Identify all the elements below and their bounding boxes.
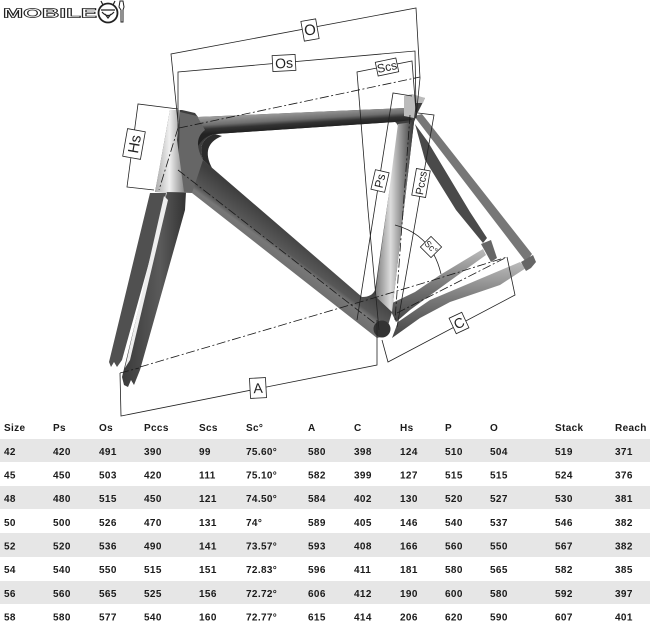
row size 42: 371: [615, 447, 633, 458]
dimension A: [120, 320, 377, 416]
row size 58: 607: [555, 612, 573, 624]
row size 45: 399: [354, 470, 372, 482]
row size 54: [4, 565, 633, 576]
row size 48: 402: [354, 494, 372, 505]
row size 45: 75.10°: [246, 470, 277, 482]
row size 56: 56: [4, 589, 16, 600]
table header: P: [445, 423, 452, 434]
row size 42: 42: [4, 447, 16, 458]
table header: C: [354, 423, 362, 434]
row size 45: 376: [615, 470, 633, 482]
row size 50: 546: [555, 518, 573, 529]
row size 54: 72.83°: [246, 565, 277, 576]
label Sc degrees: Sc°: [422, 238, 440, 256]
row size 58: 160: [199, 612, 217, 624]
table header: Stack: [555, 423, 584, 434]
row size 52: 141: [199, 542, 217, 552]
row size 42: 124: [400, 447, 418, 458]
row size 42: 420: [53, 447, 71, 458]
table header: Sc°: [246, 423, 263, 434]
table header: Size: [4, 423, 25, 434]
row size 54: 181: [400, 565, 418, 576]
row size 52: 593: [308, 542, 326, 552]
row size 58: 540: [144, 612, 162, 624]
row size 45: 111: [199, 470, 216, 482]
chain stays: [388, 249, 526, 338]
row size 56: 600: [445, 589, 463, 600]
row size 58: 206: [400, 612, 418, 624]
row size 52: 382: [615, 542, 633, 552]
row size 50: 526: [99, 518, 117, 529]
row size 45: 515: [490, 470, 508, 482]
label Hs: [123, 129, 146, 159]
row size 50: 500: [53, 518, 71, 529]
row size 54: 540: [53, 565, 71, 576]
row size 42: 390: [144, 447, 162, 458]
row size 54: 515: [144, 565, 162, 576]
row size 52: 560: [445, 542, 463, 552]
row size 58: 580: [53, 612, 71, 624]
dimension Os: [178, 51, 416, 128]
row size 56: 592: [555, 589, 573, 600]
row size 56: 580: [490, 589, 508, 600]
dropouts: [481, 240, 536, 271]
row size 58: 590: [490, 612, 508, 624]
row size 48: 381: [615, 494, 633, 505]
row size 56: 525: [144, 589, 162, 600]
row size 45: 524: [555, 470, 573, 482]
row size 50: 537: [490, 518, 508, 529]
row size 54: 582: [555, 565, 573, 576]
row size 48: 480: [53, 494, 71, 505]
table header: A: [308, 423, 316, 434]
inner dark band: [201, 134, 222, 168]
dimension Ps: [357, 93, 412, 320]
label O: O: [303, 21, 317, 40]
row size 50: [4, 518, 633, 529]
row size 42: 519: [555, 447, 573, 458]
label Os: Os: [275, 55, 293, 71]
table header: Reach: [615, 423, 647, 434]
geometry table: [0, 423, 650, 624]
row size 52: 408: [354, 542, 372, 552]
row size 54: 411: [354, 565, 371, 576]
row size 56: 606: [308, 589, 326, 600]
label C: C: [451, 314, 467, 332]
table header: Hs: [400, 423, 414, 434]
row size 48: 527: [490, 494, 508, 505]
label Ps: [371, 170, 389, 192]
row size 54: 385: [615, 565, 633, 576]
row size 45: [4, 470, 633, 482]
row size 54: 580: [445, 565, 463, 576]
row size 48: 48: [4, 494, 16, 505]
row size 45: 420: [144, 470, 162, 482]
main triangle tubes: [155, 95, 425, 338]
row size 50: 470: [144, 518, 162, 529]
row size 50: 50: [4, 518, 16, 529]
row size 42: [4, 447, 633, 458]
row size 42: 491: [99, 447, 117, 458]
row size 50: 405: [354, 518, 372, 529]
fork highlight: [125, 196, 168, 368]
row size 52: 52: [4, 542, 16, 552]
top tube: [186, 108, 412, 148]
row size 52: [4, 542, 633, 552]
row size 42: 398: [354, 447, 372, 458]
label Pccs: Pccs: [414, 170, 430, 196]
row size 58: 615: [308, 612, 326, 624]
dimension Scs: [357, 61, 416, 330]
row size 56: [4, 589, 633, 600]
row size 48: 450: [144, 494, 162, 505]
row size 54: 565: [490, 565, 508, 576]
row size 56: 565: [99, 589, 117, 600]
row size 50: 382: [615, 518, 633, 529]
label A: A: [253, 380, 264, 396]
row size 52: 166: [400, 542, 418, 552]
row size 52: 520: [53, 542, 71, 552]
row size 42: 580: [308, 447, 326, 458]
label Ps: Ps: [372, 173, 388, 189]
row size 56: 156: [199, 589, 217, 600]
dimension Hs: [127, 104, 178, 190]
row size 48: 74.50°: [246, 494, 277, 505]
bottom bracket: [374, 320, 390, 338]
row size 54: 550: [99, 565, 117, 576]
row size 45: 515: [445, 470, 463, 482]
row size 48: 520: [445, 494, 463, 505]
label Hs: Hs: [125, 134, 145, 155]
row size 58: 401: [615, 612, 633, 624]
row size 48: 130: [400, 494, 418, 505]
row size 54: 54: [4, 565, 16, 576]
bicycle frame and fork: [109, 94, 536, 387]
row size 42: 510: [445, 447, 463, 458]
fork: rear blade: [109, 193, 166, 367]
head junction shading: [178, 112, 205, 193]
row size 56: 412: [354, 589, 372, 600]
row size 42: 99: [199, 447, 211, 458]
row size 45: 503: [99, 470, 117, 482]
table header: [4, 423, 647, 434]
row size 50: 589: [308, 518, 326, 529]
seat cluster: [404, 94, 425, 118]
row size 48: 515: [99, 494, 117, 505]
table header: Ps: [53, 423, 66, 434]
row size 50: 131: [199, 518, 217, 529]
row size 45: 582: [308, 470, 326, 482]
row size 52: 567: [555, 542, 573, 552]
table header: O: [490, 423, 498, 434]
label A: [249, 378, 267, 398]
logo: Mobile01: MOBILE: [3, 6, 98, 20]
row size 50: 540: [445, 518, 463, 529]
angle Sc arc: [395, 225, 441, 274]
row size 54: 151: [199, 565, 217, 576]
logo: Mobile01: [3, 1, 124, 22]
row size 58: 620: [445, 612, 463, 624]
label Scs: Scs: [376, 58, 398, 76]
row size 42: 75.60°: [246, 447, 277, 458]
head tube: [155, 110, 184, 192]
row size 50: 146: [400, 518, 418, 529]
row size 52: 536: [99, 542, 117, 552]
row size 56: 397: [615, 589, 633, 600]
row size 48: 121: [199, 494, 217, 505]
dimension O: [171, 8, 420, 122]
table header: Scs: [199, 423, 218, 434]
seat stays: [414, 114, 532, 262]
label O: [301, 19, 319, 41]
row size 56: 560: [53, 589, 71, 600]
row size 56: 190: [400, 589, 418, 600]
dimension C: [382, 257, 515, 362]
dimension lines: [120, 8, 515, 416]
table header: Pccs: [144, 423, 169, 434]
row size 58: 414: [354, 612, 372, 624]
row size 48: 530: [555, 494, 573, 505]
row size 50: 74°: [246, 518, 262, 529]
fork: front blade: [122, 192, 186, 387]
row size 56: 72.72°: [246, 589, 277, 600]
row size 52: 73.57°: [246, 542, 277, 552]
table header: Os: [99, 423, 113, 434]
label Sc degrees: [420, 236, 442, 258]
row size 45: 127: [400, 470, 418, 482]
row shading: [0, 439, 650, 604]
dimension Pccs: [397, 113, 434, 327]
row size 42: 504: [490, 447, 508, 458]
row size 58: 577: [99, 612, 117, 624]
row size 58: 72.77°: [246, 612, 277, 624]
seat tube: [375, 122, 414, 312]
row size 45: 45: [4, 470, 16, 482]
row size 54: 596: [308, 565, 326, 576]
axis dash-dot lines: [120, 77, 507, 373]
row size 45: 450: [53, 470, 71, 482]
row size 48: 584: [308, 494, 326, 505]
row size 58: [4, 612, 633, 624]
row size 58: 58: [4, 612, 16, 624]
row size 48: [4, 494, 633, 505]
row size 52: 550: [490, 542, 508, 552]
row size 52: 490: [144, 542, 162, 552]
